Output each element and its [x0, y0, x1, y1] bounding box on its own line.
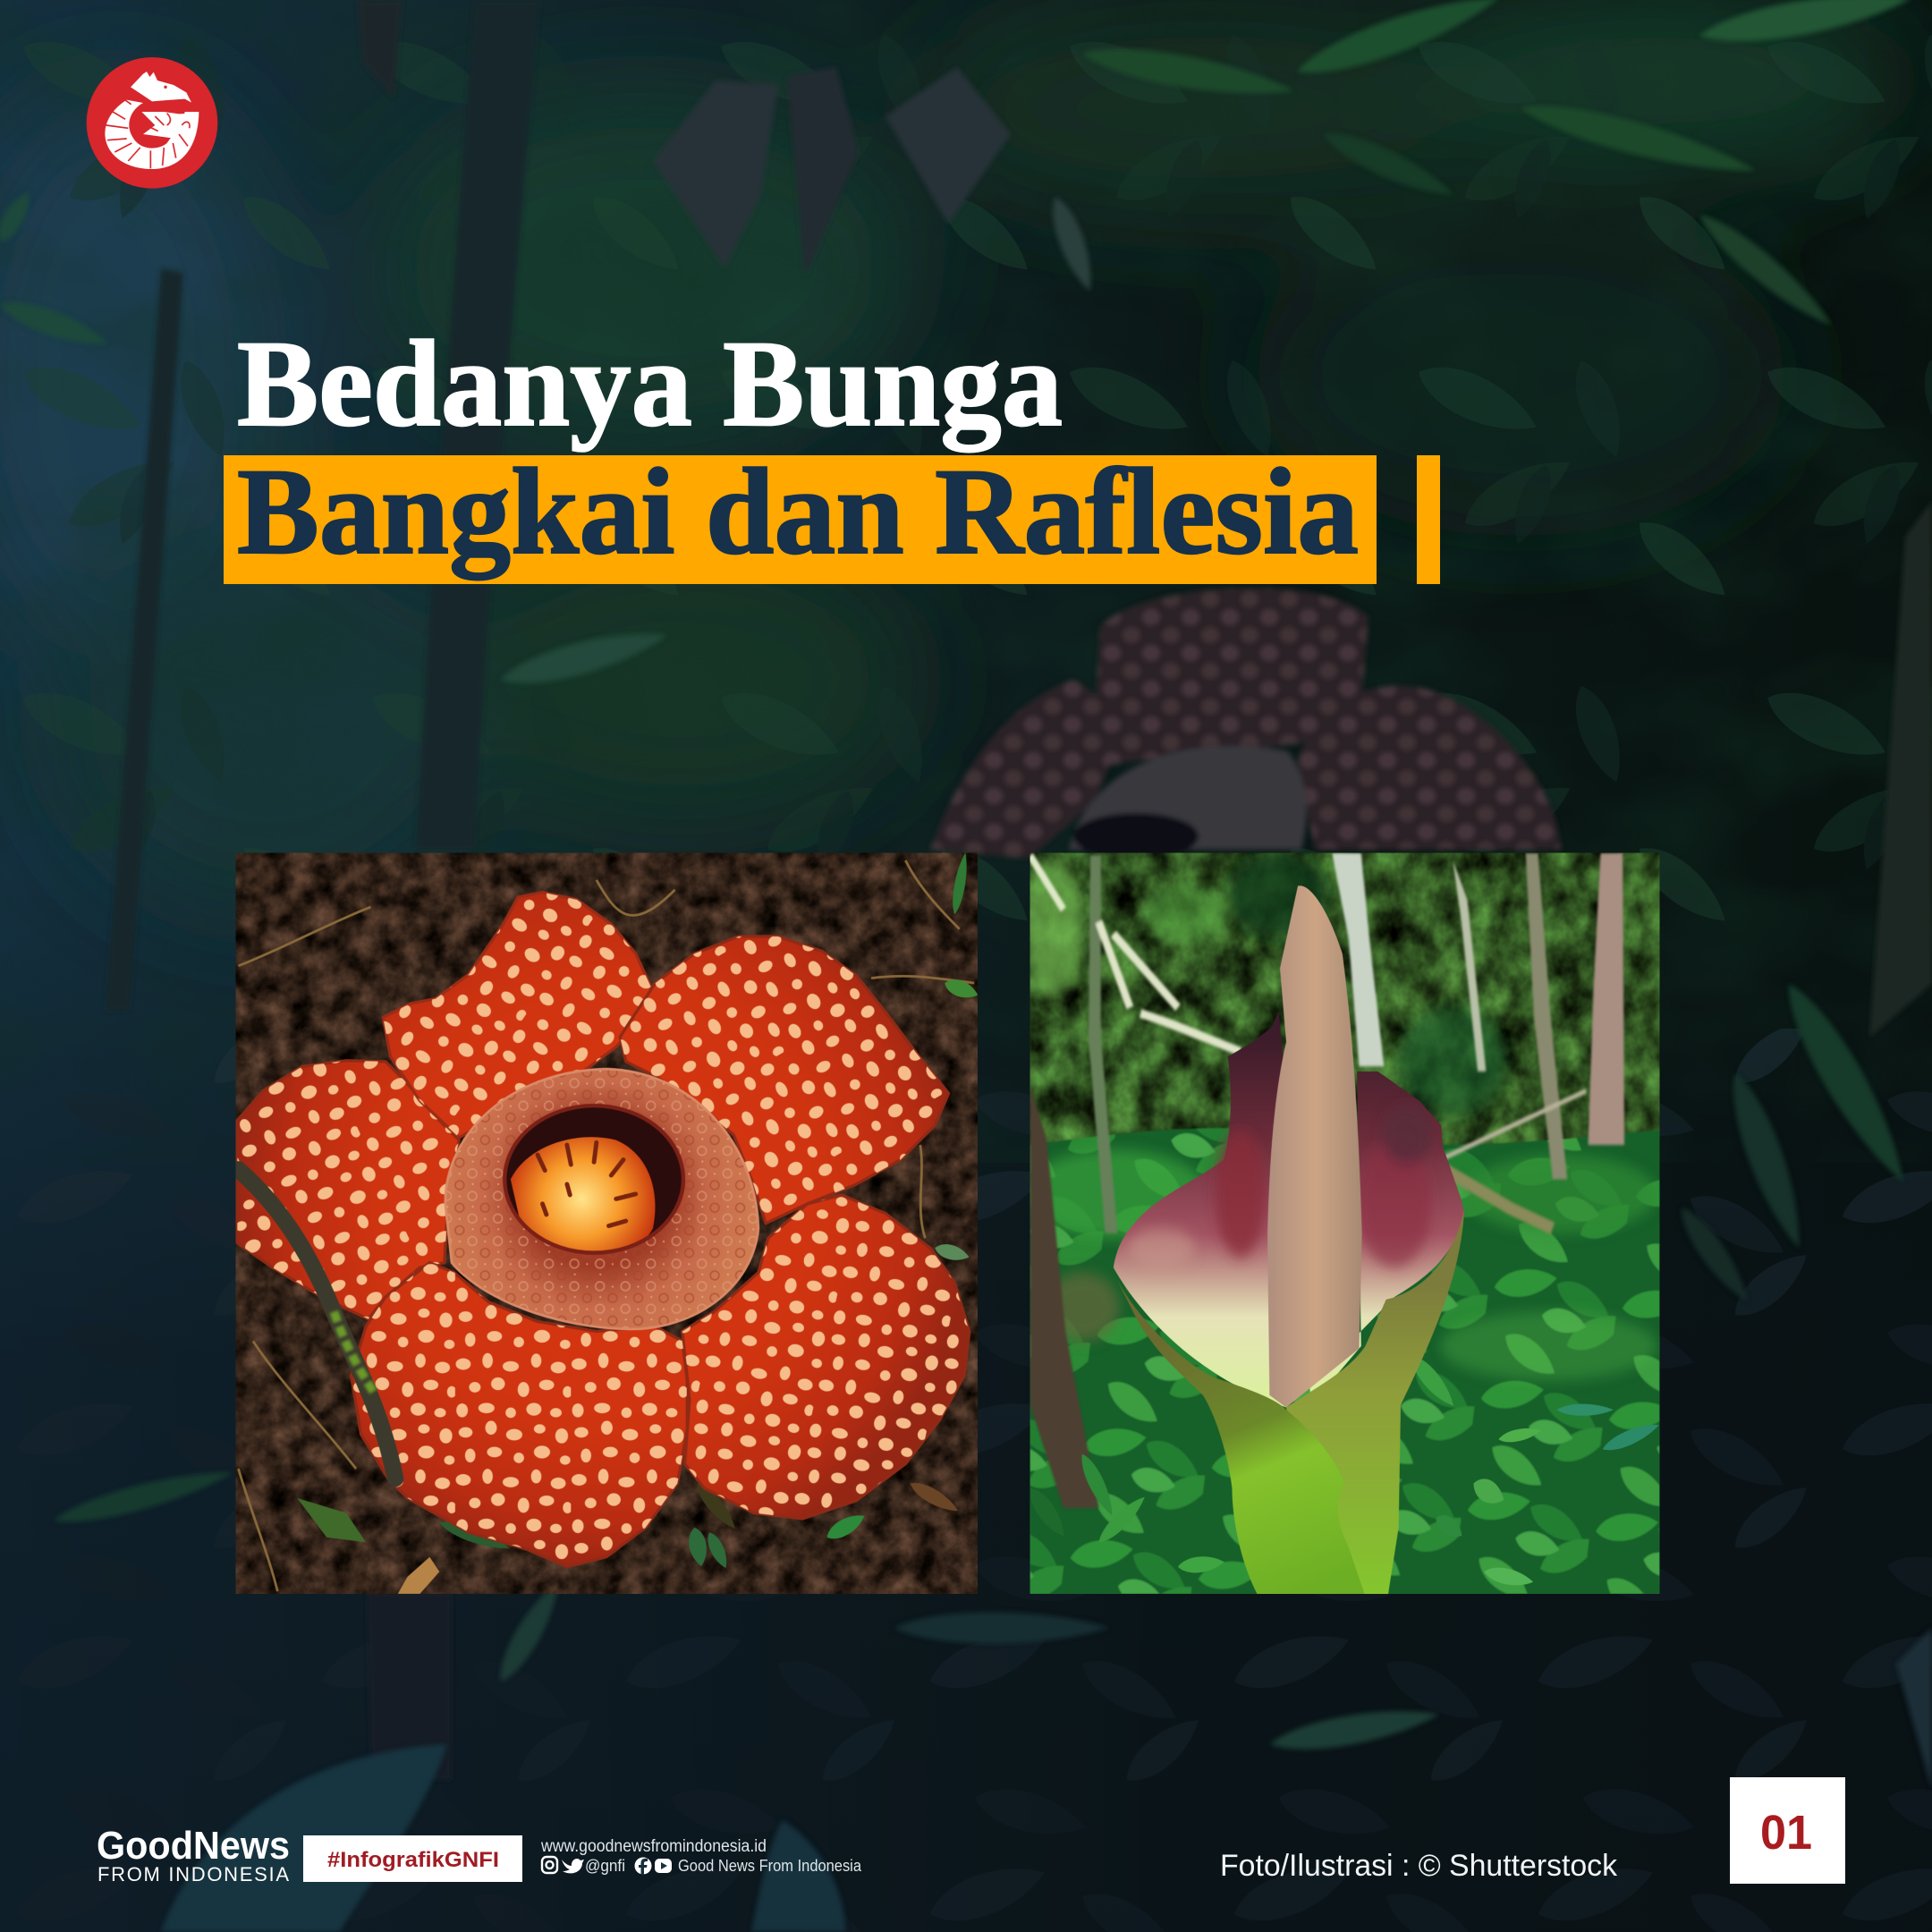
foreground leaves [1076, 1450, 1118, 1520]
petal: lower right [682, 1195, 970, 1519]
tree trunks [1030, 853, 1624, 1508]
forest backdrop [1023, 851, 1661, 1594]
petal: top [383, 893, 651, 1138]
title line 1: Bedanya Bunga [237, 315, 1063, 452]
hanging dark leaves [358, 0, 1011, 277]
footer: website and social handles: www.goodnewsfromindonesia.id [540, 1837, 767, 1856]
soil ground [236, 852, 980, 1594]
footer: hashtag badge: #InfografikGNFI [327, 1848, 499, 1872]
footer: website and social handles [540, 1837, 862, 1875]
footer: website and social handles: @gnfi [585, 1857, 625, 1875]
petal: left [237, 1061, 459, 1319]
title accent bar [1417, 455, 1440, 584]
spathe outer front wrap [1114, 1273, 1364, 1594]
petal: bottom [352, 1263, 687, 1567]
center disc [445, 1069, 758, 1329]
ghost flower behind photos [930, 588, 1561, 860]
footer: GoodNews wordmark: GoodNews [97, 1824, 290, 1868]
footer: hashtag badge [303, 1835, 522, 1882]
root vine [238, 1169, 395, 1479]
icon: facebook [635, 1857, 651, 1875]
spathe interior [1114, 1012, 1464, 1407]
icon: twitter [562, 1859, 584, 1873]
spathe outer right fold [1286, 1208, 1464, 1594]
photo credit: Foto/Ilustrasi : © Shutterstock [1220, 1849, 1618, 1883]
title line 2 highlight: Bangkai dan Raflesia [237, 443, 1359, 580]
photo panel: rafflesia [236, 852, 980, 1594]
footer: GoodNews wordmark [97, 1824, 290, 1885]
page number badge: 01 [1760, 1806, 1812, 1860]
logo: GNFI eagle badge [87, 57, 217, 189]
petal: upper right [620, 936, 949, 1224]
icon: youtube [655, 1859, 672, 1873]
page number badge [1730, 1777, 1845, 1884]
footer: website and social handles: Good News From Indonesia [678, 1857, 862, 1875]
photo panel: corpse flower [1023, 851, 1661, 1594]
icon: instagram [542, 1857, 557, 1873]
spadix [1267, 886, 1362, 1407]
footer: GoodNews wordmark: FROM INDONESIA [97, 1863, 289, 1885]
title [224, 315, 1440, 584]
